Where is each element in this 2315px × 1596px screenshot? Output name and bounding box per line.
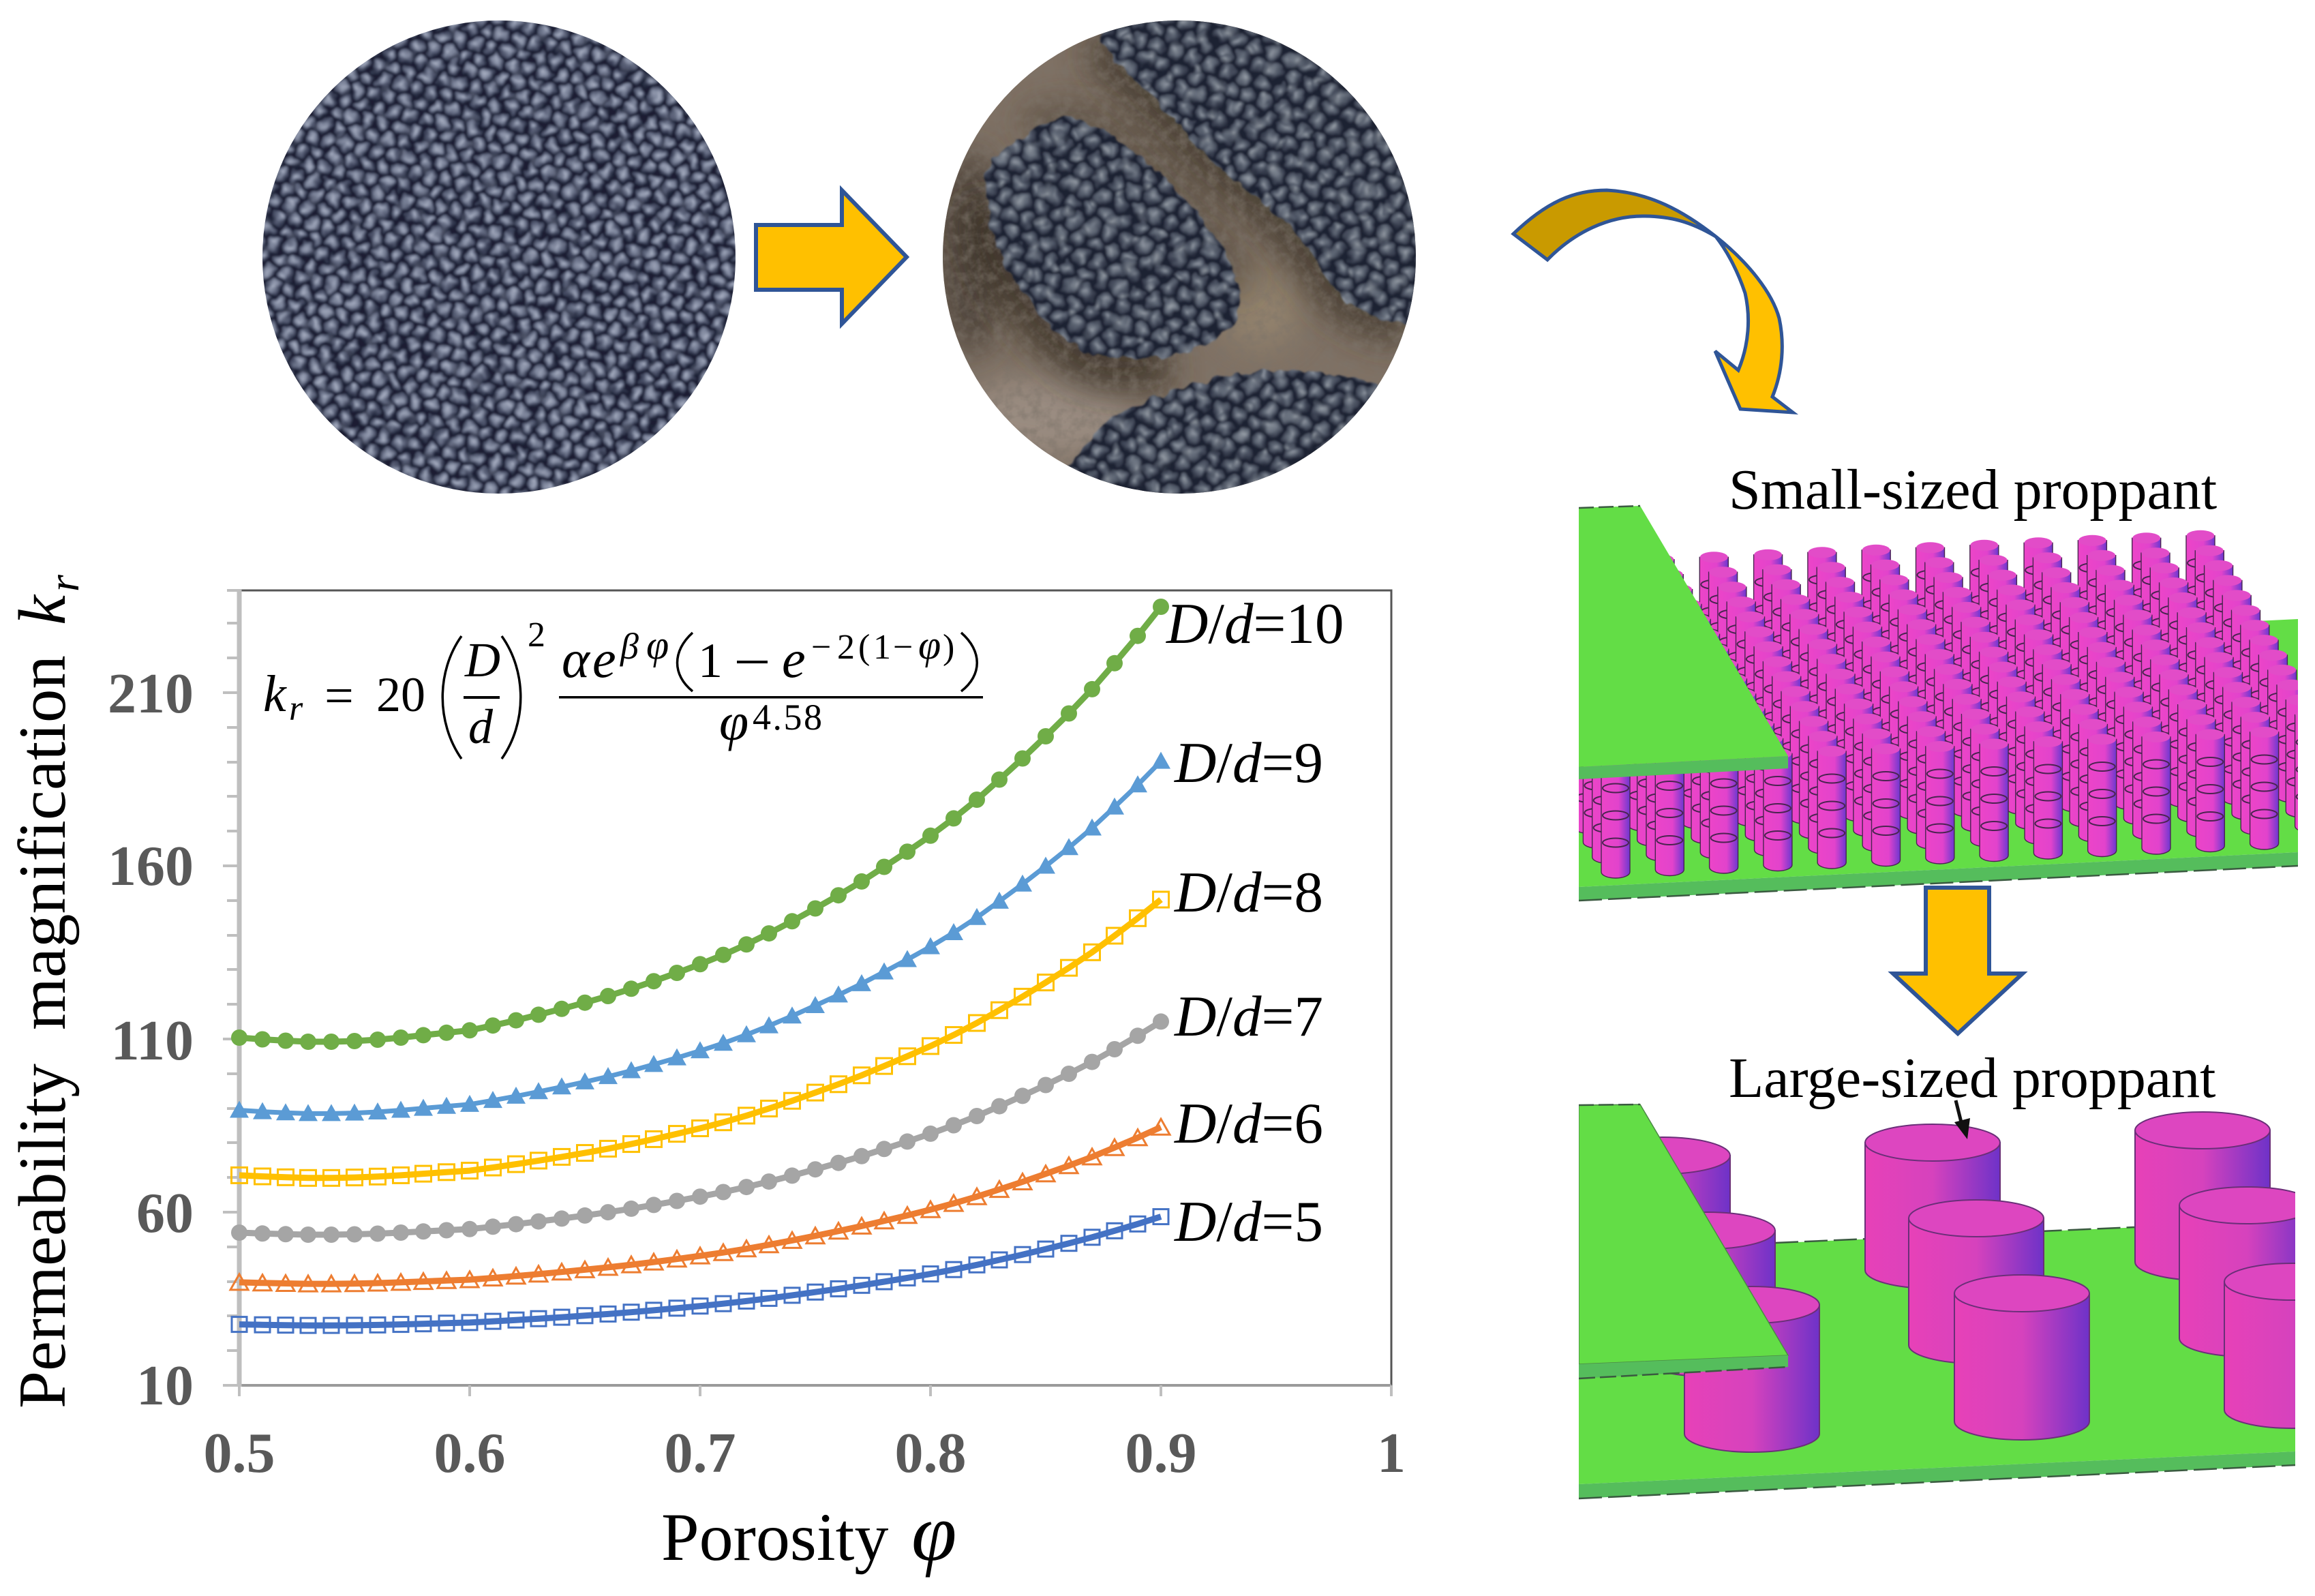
series: D/d=9	[239, 762, 1161, 1113]
equation: e	[782, 629, 806, 689]
upper plate	[1579, 506, 1788, 779]
arrow: curved arrow to model	[1513, 190, 1793, 412]
equation: 4.58	[753, 697, 822, 738]
y tick labels: 10	[136, 1354, 194, 1417]
equation: −2(1−	[811, 628, 913, 667]
chart: permeability magnification vs porosity	[5, 574, 1406, 1578]
x tick labels	[203, 1421, 1406, 1485]
series labels: D/d=8	[1174, 860, 1323, 924]
figure: large-sized proppant model	[1579, 1104, 2315, 1499]
equation: 20	[376, 667, 425, 722]
x tick labels: 0.8	[894, 1421, 967, 1485]
large proppant cylinder group left	[1659, 1136, 1820, 1453]
label: small-sized proppant: Small-sized proppant	[1729, 458, 2217, 522]
series: D/d=5	[239, 1217, 1161, 1325]
label: large-sized proppant: Large-sized proppant	[1729, 1047, 2215, 1110]
series labels	[1166, 592, 1344, 1254]
figure: small-sized proppant model	[1483, 506, 2315, 901]
y axis title: Permeability	[5, 1064, 80, 1409]
image: clustered proppant pillars	[943, 20, 1416, 494]
series labels: D/d=7	[1174, 984, 1323, 1049]
series: D/d=8	[239, 900, 1161, 1178]
series labels: D/d=10	[1166, 592, 1344, 656]
x tick labels: 0.9	[1125, 1421, 1197, 1485]
series labels: D/d=5	[1174, 1190, 1323, 1254]
small proppant columns	[1579, 530, 2298, 879]
equation: φ	[646, 622, 669, 667]
equation: α	[562, 629, 591, 689]
x tick labels: 0.7	[664, 1421, 736, 1485]
equation: e	[592, 629, 616, 689]
y axis title	[5, 574, 88, 1409]
equation: )	[943, 628, 954, 667]
x axis title: φ	[911, 1487, 956, 1578]
series: D/d=7	[239, 1021, 1161, 1235]
y tick labels: 210	[108, 662, 194, 725]
x tick labels: 0.6	[434, 1421, 506, 1485]
equation: k	[263, 665, 287, 723]
upper plate	[1579, 1104, 1788, 1379]
equation: d	[468, 699, 494, 754]
equation: φ	[918, 622, 941, 667]
large proppant cylinder group middle	[1865, 1124, 2089, 1440]
equation: 1	[698, 633, 723, 688]
equation: r	[289, 689, 303, 728]
y axis title: r	[40, 574, 88, 592]
shadowed gaps between proppant columns	[1636, 593, 2298, 828]
x axis title: Porosity	[661, 1499, 888, 1575]
series labels: D/d=9	[1174, 731, 1323, 795]
image: uniform small proppant pack	[262, 20, 736, 494]
y axis title: magnification	[5, 655, 80, 1030]
lower plate	[1579, 1220, 2295, 1499]
series: D/d=6	[239, 1127, 1161, 1284]
equation: =	[324, 667, 354, 725]
chart frame and axes	[223, 589, 1391, 1396]
x tick labels: 1	[1377, 1421, 1406, 1485]
y tick labels	[108, 662, 194, 1417]
equation: 2	[528, 616, 545, 654]
lower plate	[1579, 619, 2298, 901]
equation: φ	[719, 692, 748, 751]
series: D/d=10	[239, 607, 1161, 1042]
equation	[263, 616, 983, 759]
x tick labels: 0.5	[203, 1421, 275, 1485]
y tick labels: 110	[111, 1009, 194, 1072]
series labels: D/d=6	[1174, 1091, 1323, 1156]
equation: β	[620, 626, 639, 667]
arrow: small to large proppant	[1893, 888, 2023, 1034]
arrow: label pointer to cylinder	[1954, 1100, 1970, 1139]
x axis title	[661, 1487, 956, 1578]
large proppant cylinder group right	[2134, 1111, 2295, 1429]
arrow: pack to clusters	[756, 190, 907, 324]
y tick labels: 60	[136, 1181, 194, 1245]
equation: D	[464, 633, 500, 687]
y tick labels: 160	[108, 834, 194, 898]
y axis title: k	[5, 594, 80, 625]
